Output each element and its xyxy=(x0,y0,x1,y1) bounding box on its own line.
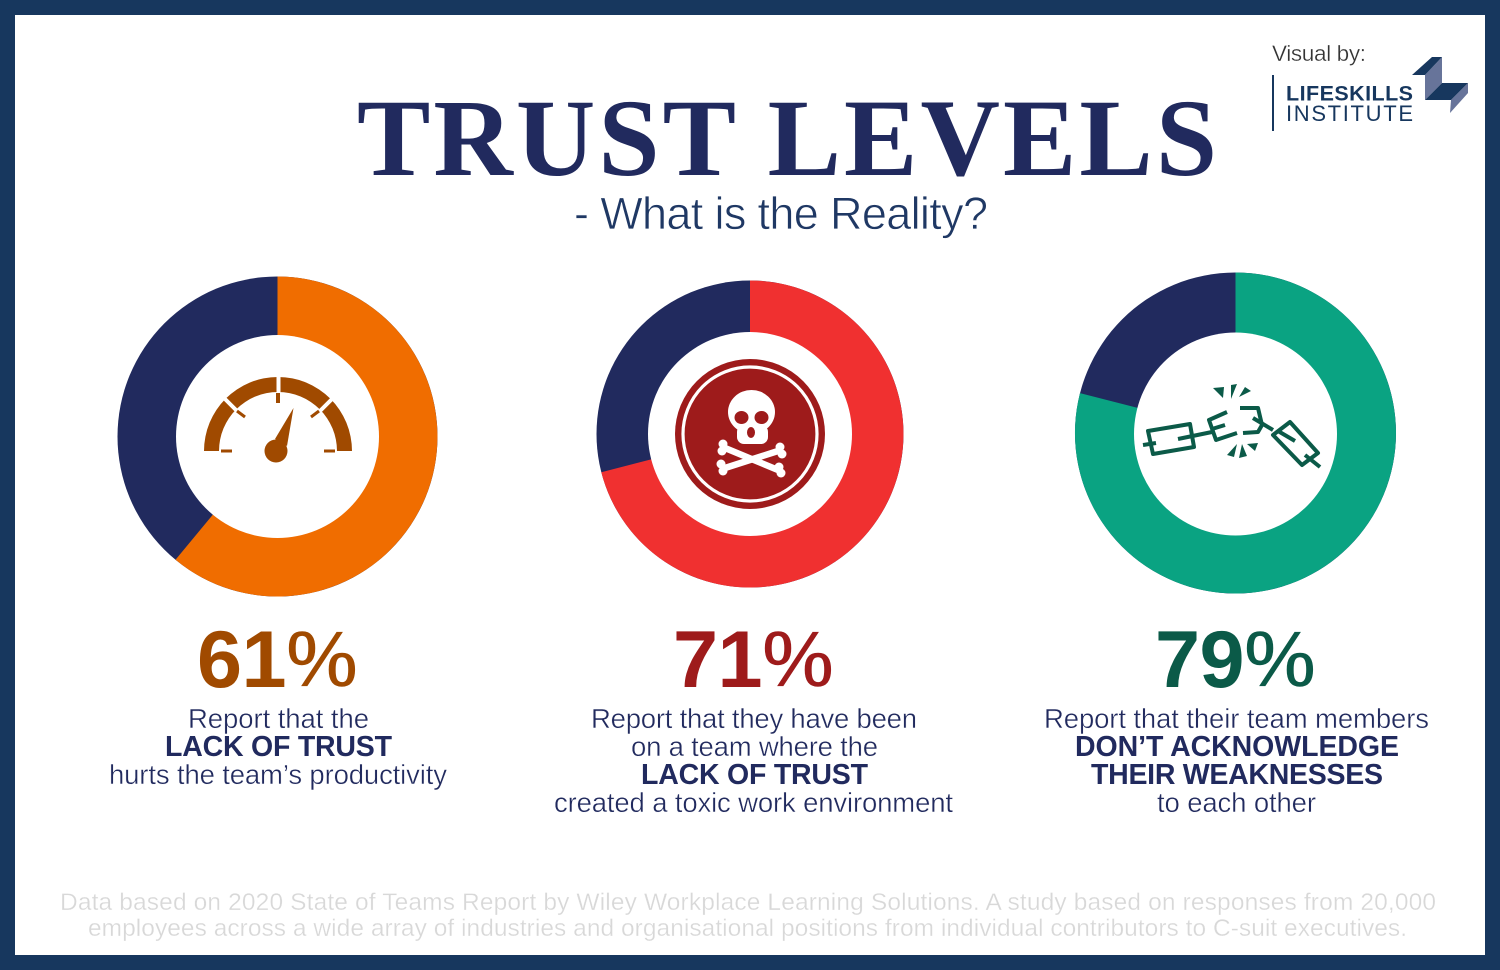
icon: skull and crossbones xyxy=(675,359,825,509)
source note xyxy=(60,889,1436,942)
logo wordmark: LIFESKILLS xyxy=(1286,82,1413,106)
logo mark xyxy=(1412,57,1468,113)
icon: speedometer xyxy=(204,370,352,462)
logo: Lifeskills Institute credit xyxy=(1272,41,1468,131)
donut chart: 61% xyxy=(118,276,438,596)
statistic: 71%: 71% xyxy=(673,615,834,705)
subtitle: - What is the Reality? xyxy=(574,188,988,239)
donut chart: 71% xyxy=(596,280,904,588)
description: DON’T ACKNOWLEDGE xyxy=(1075,731,1399,763)
description: created a toxic work environment xyxy=(554,787,953,818)
source note: Data based on 2020 State of Teams Report by Wiley Workplace Learning Solutions. A study based on responses from 20,000 xyxy=(60,889,1436,916)
description xyxy=(1044,703,1429,818)
panel: toxic environment xyxy=(554,280,953,818)
statistic: 79%: 79% xyxy=(1155,615,1316,705)
description: Report that they have been xyxy=(591,703,917,734)
description: LACK OF TRUST xyxy=(165,731,393,763)
panel: productivity xyxy=(109,276,447,790)
description: to each other xyxy=(1157,787,1316,818)
description: Report that their team members xyxy=(1044,703,1429,734)
description: hurts the team’s productivity xyxy=(109,759,447,790)
logo wordmark xyxy=(1286,82,1413,126)
title: TRUST LEVELS xyxy=(357,77,1217,199)
description xyxy=(554,703,953,818)
description: THEIR WEAKNESSES xyxy=(1091,759,1383,791)
logo wordmark: INSTITUTE xyxy=(1286,101,1413,126)
description xyxy=(109,703,447,790)
source note: employees across a wide array of industries and organisational positions from individual contributors to C-suit executives. xyxy=(88,915,1407,942)
logo divider xyxy=(1272,75,1274,131)
panel: weaknesses xyxy=(1044,272,1429,818)
description: Report that the xyxy=(188,703,369,734)
icon: broken chain xyxy=(1143,384,1320,467)
donut chart: 79% xyxy=(1075,272,1396,594)
description: on a team where the xyxy=(631,731,878,762)
description: LACK OF TRUST xyxy=(641,759,869,791)
statistic: 61%: 61% xyxy=(197,615,358,705)
credit label: Visual by: xyxy=(1272,41,1366,66)
